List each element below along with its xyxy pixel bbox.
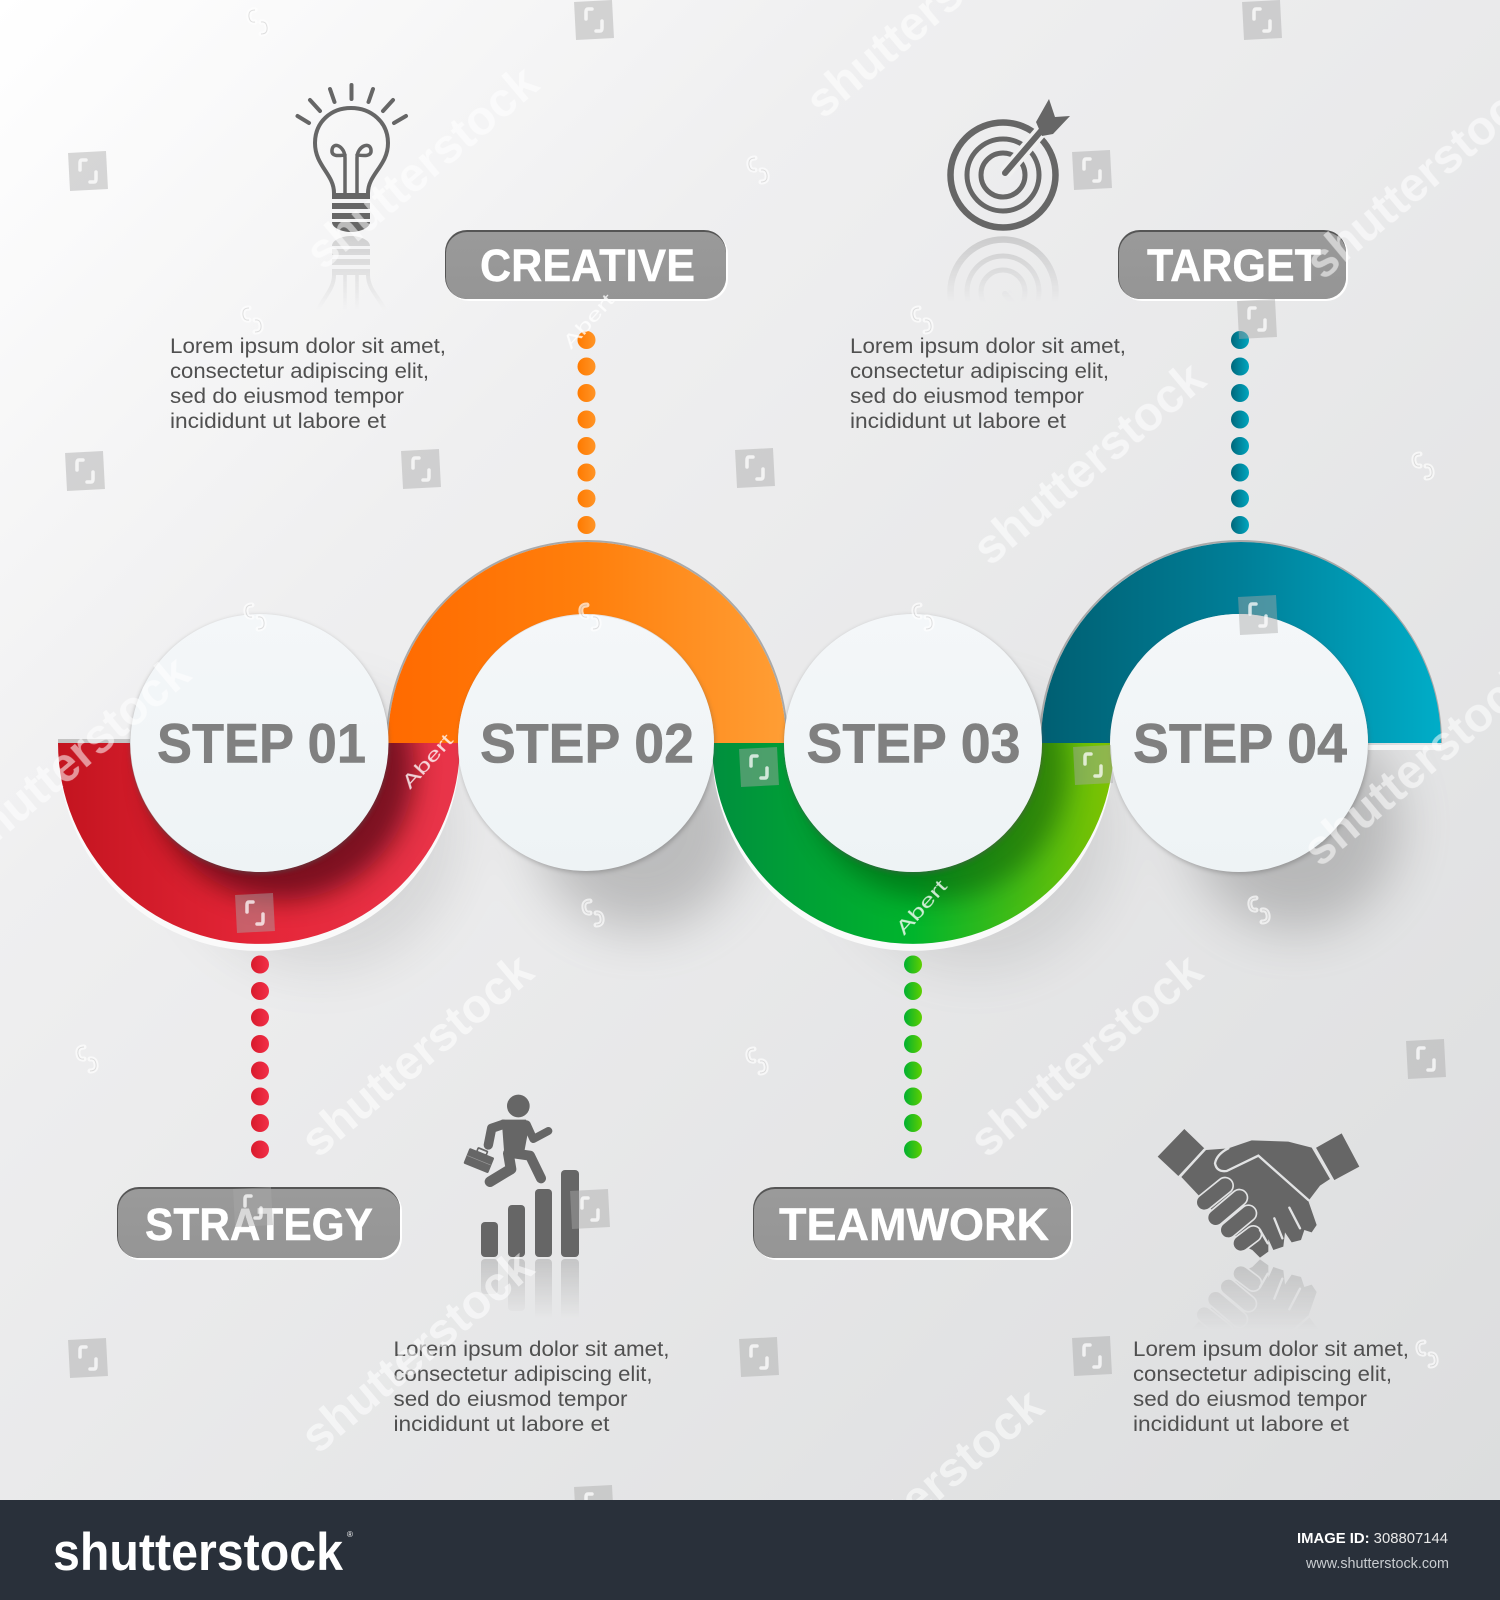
footer bar: ® bbox=[347, 1530, 353, 1539]
long shadows behind the step chain bbox=[180, 690, 1400, 970]
step circle 02: STEP 02 bbox=[480, 712, 694, 774]
label pill: target: TARGET bbox=[1147, 240, 1321, 291]
footer bar: www.shutterstock.com bbox=[1305, 1555, 1449, 1572]
text block: strategy bbox=[394, 1337, 670, 1436]
text block: creative: Lorem ipsum dolor sit amet, bbox=[170, 334, 446, 358]
text block: target: incididunt ut labore et bbox=[850, 409, 1066, 433]
text block: creative: consectetur adipiscing elit, bbox=[170, 359, 429, 383]
label pill: teamwork: TEAMWORK bbox=[779, 1199, 1049, 1250]
text block: creative bbox=[170, 334, 446, 433]
watermark overlay: shutterstock bbox=[960, 943, 1213, 1167]
panel: step 04 teal half ring bbox=[1040, 541, 1441, 750]
text block: strategy: consectetur adipiscing elit, bbox=[394, 1362, 652, 1386]
label pill: target bbox=[1118, 230, 1348, 301]
label pill: strategy: STRATEGY bbox=[145, 1199, 373, 1250]
text block: strategy: incididunt ut labore et bbox=[394, 1412, 610, 1436]
dotted connector: target bbox=[1231, 331, 1249, 534]
icon: target with arrow bbox=[947, 99, 1070, 286]
step circle 04 bbox=[1110, 614, 1369, 874]
step circle 01: STEP 01 bbox=[157, 712, 366, 774]
label pill: strategy bbox=[117, 1187, 402, 1260]
step circle 03 bbox=[784, 614, 1042, 874]
text block: teamwork bbox=[1133, 1337, 1409, 1436]
text block: strategy: Lorem ipsum dolor sit amet, bbox=[394, 1337, 670, 1361]
icon: handshake bbox=[1158, 1129, 1360, 1313]
text block: teamwork: incididunt ut labore et bbox=[1133, 1412, 1349, 1436]
footer bar: shutterstock bbox=[53, 1523, 343, 1582]
watermark overlay: shutterstock bbox=[291, 943, 544, 1167]
panel: step 03 green half ring bbox=[712, 743, 1113, 951]
panel: step 02 orange half ring bbox=[387, 541, 787, 743]
text block: target: sed do eiusmod tempor bbox=[850, 384, 1084, 408]
text block: teamwork: consectetur adipiscing elit, bbox=[1133, 1362, 1392, 1386]
text block: target: consectetur adipiscing elit, bbox=[850, 359, 1109, 383]
text block: target bbox=[850, 334, 1126, 433]
label pill: creative: CREATIVE bbox=[480, 240, 695, 291]
dotted connector: creative bbox=[578, 331, 596, 534]
text block: creative: sed do eiusmod tempor bbox=[170, 384, 404, 408]
footer bar bbox=[0, 1500, 1500, 1600]
text block: teamwork: Lorem ipsum dolor sit amet, bbox=[1133, 1337, 1409, 1361]
text block: strategy: sed do eiusmod tempor bbox=[394, 1387, 628, 1411]
dotted connector: teamwork bbox=[904, 956, 922, 1158]
dotted connector: strategy bbox=[251, 956, 269, 1158]
watermark overlay: shutterstock bbox=[296, 55, 549, 279]
watermark overlay: shutterstock bbox=[801, 1378, 1054, 1600]
step circle 02 bbox=[458, 615, 715, 873]
watermark overlay: shutterstock bbox=[291, 1239, 544, 1463]
watermark overlay: Abert bbox=[398, 730, 457, 793]
step circle 04: STEP 04 bbox=[1133, 712, 1347, 774]
watermark overlay: Abert bbox=[559, 290, 618, 353]
text block: teamwork: sed do eiusmod tempor bbox=[1133, 1387, 1367, 1411]
step circle 03: STEP 03 bbox=[806, 712, 1020, 774]
text block: target: Lorem ipsum dolor sit amet, bbox=[850, 334, 1126, 358]
icon: light bulb bbox=[295, 83, 408, 294]
watermark overlay: Abert bbox=[892, 876, 951, 939]
step circle 01 bbox=[130, 614, 388, 874]
label pill: creative bbox=[445, 230, 728, 301]
panel: step 01 red half ring bbox=[58, 739, 460, 951]
footer bar: IMAGE ID: 308807144 bbox=[1297, 1530, 1448, 1547]
watermark overlay: shutterstock bbox=[963, 351, 1216, 575]
label pill: teamwork bbox=[753, 1187, 1073, 1260]
icon: businessman climbing bar chart bbox=[464, 1094, 579, 1304]
text block: creative: incididunt ut labore et bbox=[170, 409, 386, 433]
